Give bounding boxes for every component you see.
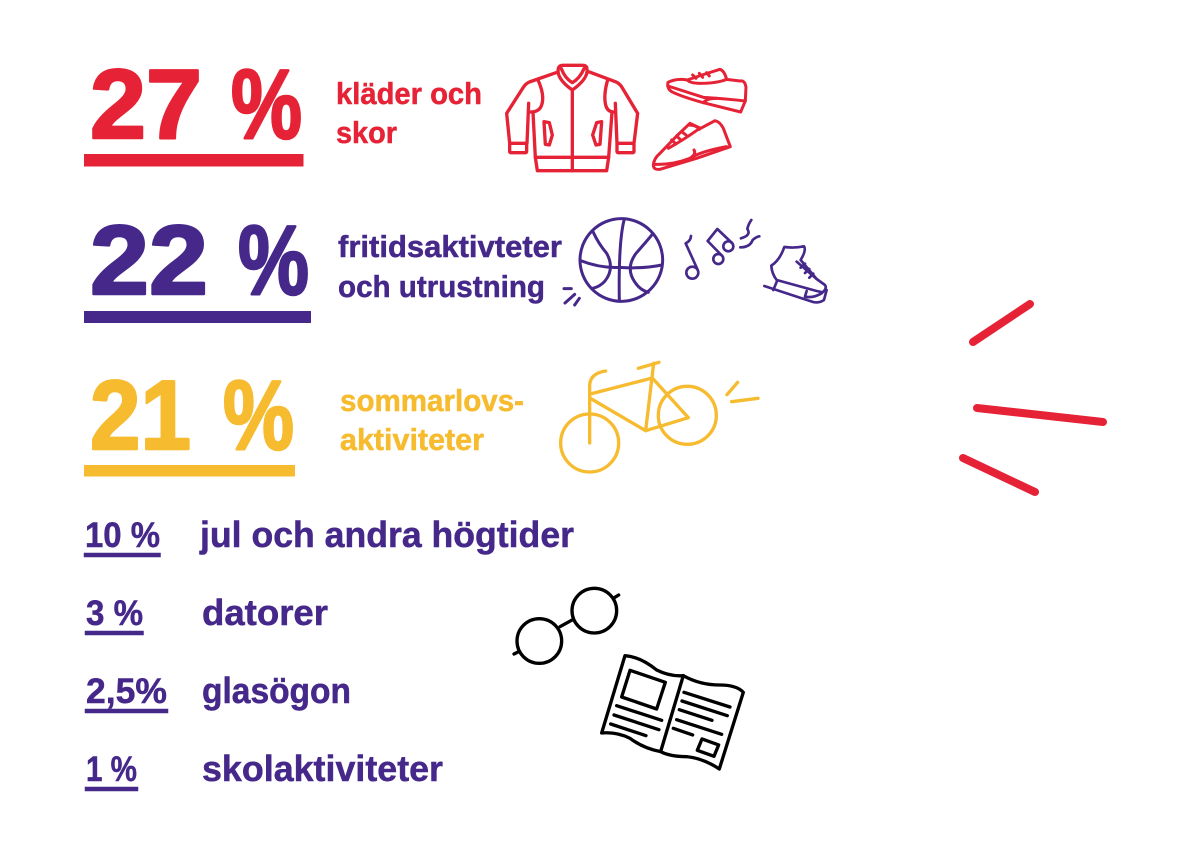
underline: 22 % xyxy=(84,311,311,323)
panel: clothes and shoes 27 % xyxy=(84,49,746,171)
label: summer holiday activities: sommarlovs- xyxy=(340,383,524,418)
list row: glasses 2,5 % xyxy=(85,670,351,713)
label: leisure activities and equipment xyxy=(338,229,562,304)
icon: jacket xyxy=(507,65,638,171)
list row: school activities 1 %: 1 % xyxy=(86,750,137,789)
list row: school activities 1 %: skolaktiviteter xyxy=(202,748,443,789)
panel: leisure 22 % xyxy=(84,205,827,323)
list row: glasses 2,5 %: 2,5% xyxy=(86,672,167,711)
label: clothes and shoes: kläder och xyxy=(336,76,482,111)
percentage: 21 % xyxy=(90,360,294,470)
list row: glasses 2,5 %: glasögon xyxy=(202,670,351,711)
percentage: 27 %: % xyxy=(231,49,302,159)
label: clothes and shoes xyxy=(336,76,482,150)
list row: computers 3 % xyxy=(85,592,328,635)
icon: ice skate xyxy=(764,246,827,302)
label: summer holiday activities xyxy=(340,383,524,457)
list row: Christmas and holidays 10 %: jul och andra högtider xyxy=(199,514,574,555)
icon: glasses xyxy=(514,588,619,663)
label: leisure activities and equipment: fritidsaktivteter xyxy=(338,229,562,264)
icon: basketball xyxy=(564,219,663,305)
percentage: 21 %: 21 xyxy=(90,360,191,470)
list row: Christmas and holidays 10 %: 10 % xyxy=(85,516,160,555)
percentage: 22 %: 22 xyxy=(90,205,208,315)
percentage: 21 %: % xyxy=(223,360,294,470)
list row: computers 3 %: 3 % xyxy=(86,594,143,633)
percentage: 27 % xyxy=(90,49,302,159)
label: leisure activities and equipment: och utrustning xyxy=(338,269,545,304)
icon: music notes xyxy=(686,220,759,279)
list row: computers 3 %: datorer xyxy=(202,592,328,633)
underline: 27 % xyxy=(84,154,304,166)
percentage: 27 %: 27 xyxy=(90,49,202,159)
icon: shoe bottom xyxy=(653,121,730,169)
icon: bicycle xyxy=(561,362,758,472)
list row: school activities 1 % xyxy=(85,748,443,791)
icon: open magazine xyxy=(602,656,743,769)
panel: summer holiday 21 % xyxy=(84,360,758,476)
underline: 21 % xyxy=(84,465,295,476)
percentage: 22 % xyxy=(90,205,309,315)
accent: red burst lines xyxy=(963,304,1103,492)
percentage: 22 %: % xyxy=(238,205,309,315)
label: clothes and shoes: skor xyxy=(336,115,397,150)
icon: shoe top xyxy=(668,69,746,112)
label: summer holiday activities: aktiviteter xyxy=(340,422,484,457)
